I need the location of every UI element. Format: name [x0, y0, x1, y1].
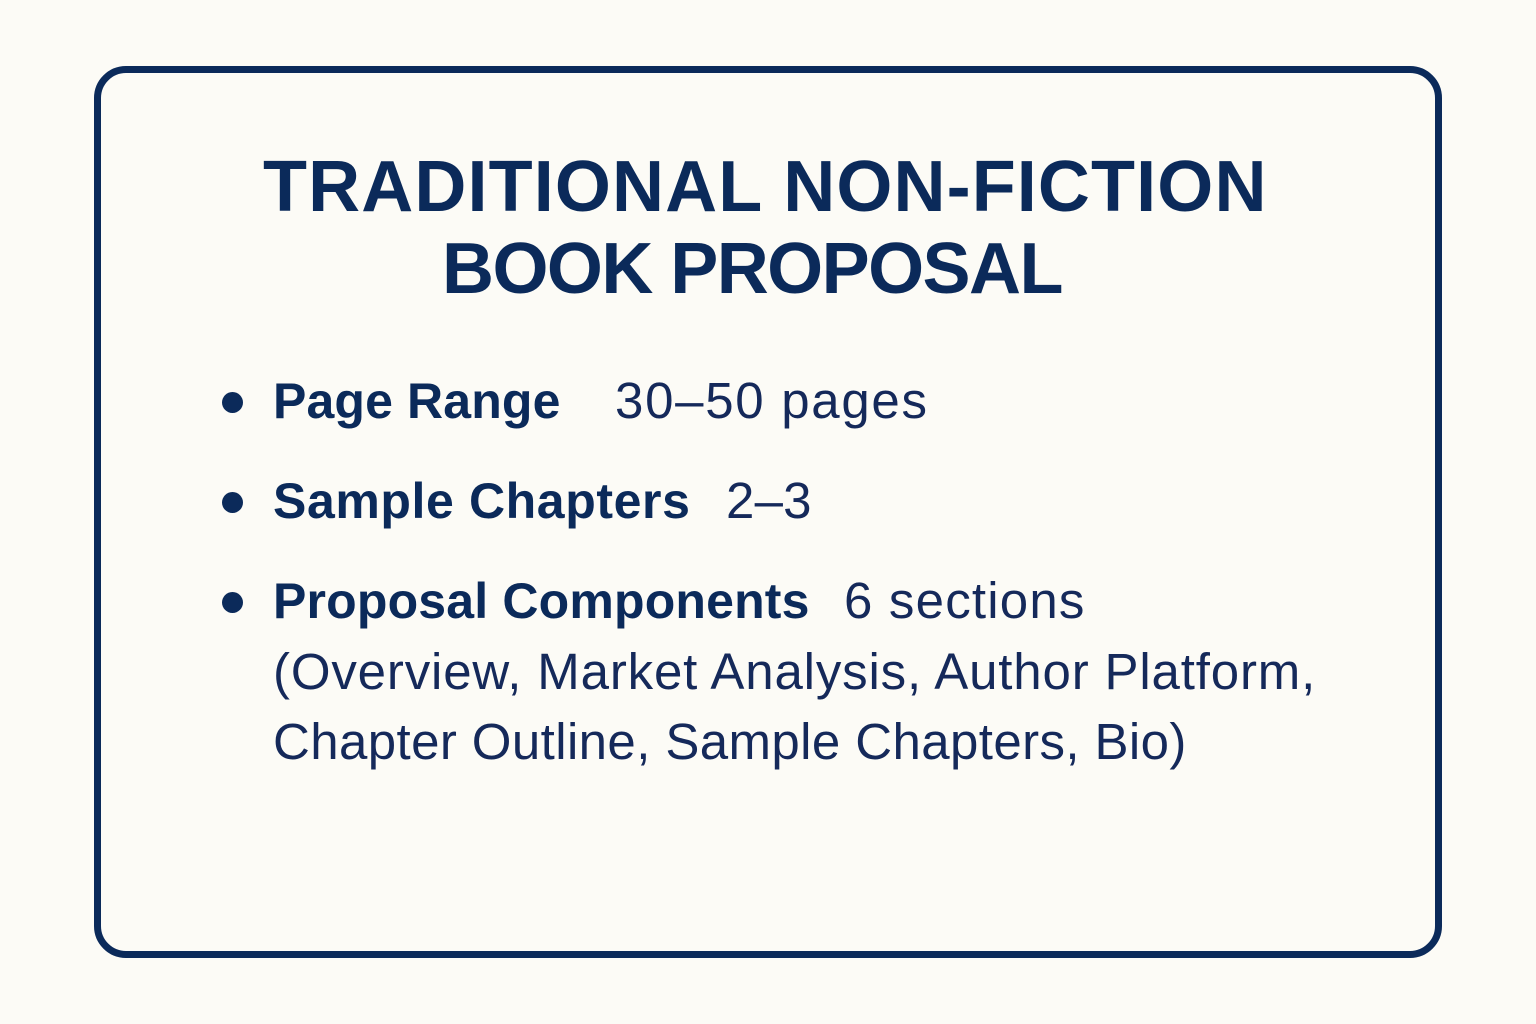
text: page range	[273, 372, 929, 429]
title: TRADITIONAL NON-FICTION	[263, 147, 1268, 227]
text: sample chapters: Sample Chapters	[273, 473, 690, 529]
text: proposal components	[273, 572, 1316, 770]
text: page range: Page Range	[273, 373, 561, 429]
text: proposal components: Proposal Components	[273, 573, 810, 629]
bullet icon: proposal components	[222, 592, 243, 613]
text: proposal components: (Overview, Market Analysis, Author Platform,	[273, 643, 1316, 700]
text: page range: 30–50 pages	[615, 372, 929, 429]
text: sample chapters: 2–3	[726, 472, 812, 529]
bullet icon: page range	[222, 392, 243, 413]
text: proposal components: Chapter Outline, Sample Chapters, Bio)	[273, 713, 1187, 770]
panel: proposal card	[94, 66, 1442, 958]
bullet icon: sample chapters	[222, 492, 243, 513]
title	[263, 147, 1268, 309]
text: proposal components: 6 sections	[844, 572, 1086, 629]
title: BOOK PROPOSAL	[442, 229, 1062, 309]
